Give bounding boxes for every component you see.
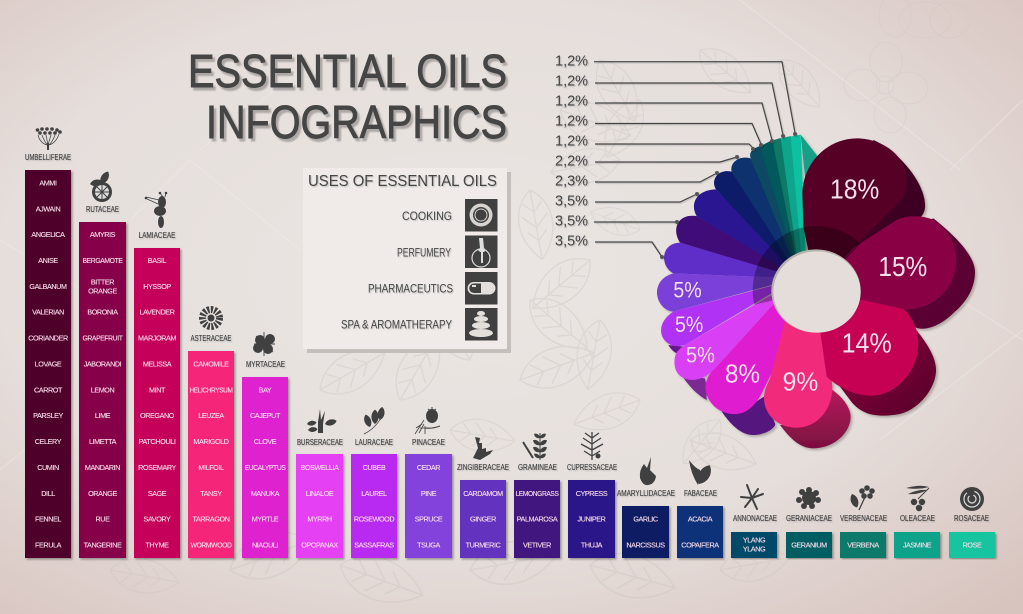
label: Amaryllidaceae: AMARYLLIDACEAE — [617, 489, 675, 498]
bar: Gramineae: LEMONGRASS — [516, 489, 559, 498]
bar: Umbelliferae: FERULA — [35, 540, 62, 550]
bar: Myrtaceae: BAY — [259, 385, 272, 394]
column: Pinaceae — [405, 407, 452, 558]
bar: Umbelliferae — [25, 170, 71, 558]
bar: Pinaceae: CEDAR — [417, 463, 440, 472]
column: Amaryllidaceae — [617, 457, 675, 558]
small percentage labels: 1,2% — [555, 94, 588, 110]
bar: Umbelliferae: DILL — [41, 489, 55, 498]
bar: Lauraceae: CUBEB — [363, 463, 386, 472]
bar: Oleaceae: JASMINE — [903, 540, 932, 550]
percentage labels: 15% — [878, 251, 927, 282]
column: Cupressaceae — [567, 432, 617, 558]
bar: Rutaceae: ORANGE — [88, 489, 117, 498]
percentage labels: 14% — [842, 328, 892, 359]
bar: Rutaceae — [79, 222, 126, 558]
title: ESSENTIAL OILS — [188, 45, 507, 97]
small percentage labels: 2,3% — [555, 174, 588, 190]
column: Rutaceae — [79, 170, 126, 558]
label: Fabaceae: FABACEAE — [684, 489, 717, 498]
small percentage labels: 3,5% — [555, 214, 588, 230]
label: Zingiberaceae: ZINGIBERACEAE — [457, 463, 509, 472]
percentage labels — [673, 173, 927, 397]
bar: Myrtaceae: MANUKA — [251, 489, 280, 498]
leader lines — [594, 62, 797, 259]
bar: Cupressaceae — [568, 480, 615, 558]
use: pharmaceutics — [368, 272, 498, 304]
centre hole — [771, 249, 861, 333]
bar: Zingiberaceae: CARDAMOM — [463, 489, 503, 498]
bar: Asteraceae: MILFOIL — [198, 463, 224, 472]
bar: Verbenaceae: VERBENA — [847, 540, 879, 550]
bar: Pinaceae — [405, 454, 452, 558]
column: Annonaceae — [731, 485, 777, 558]
bar: Asteraceae: TANSY — [200, 489, 222, 498]
bar: Umbelliferae: FENNEL — [35, 515, 61, 524]
bar: Lauraceae: SASSAFRAS — [354, 540, 394, 550]
bar: Umbelliferae: ANGELICA — [31, 230, 65, 239]
heading: uses of essential oils: USES OF ESSENTIAL OILS — [308, 173, 497, 190]
bar: Cupressaceae: JUNIPER — [578, 515, 606, 524]
petal faces — [657, 135, 956, 428]
bar: Pinaceae: SPRUCE — [415, 515, 443, 524]
bar: Lamiaceae: THYME — [145, 540, 169, 550]
use: spa and aromatherapy: SPA & AROMATHERAPY — [341, 318, 452, 332]
icon: frankincense sprig — [307, 409, 337, 433]
percentage labels: 5% — [673, 277, 702, 302]
small percentage labels: 1,2% — [555, 74, 588, 90]
column: Burseraceae — [296, 409, 343, 558]
bar: Rutaceae: LIMETTA — [89, 437, 117, 446]
bar: Burseraceae — [296, 454, 343, 558]
bar: Myrtaceae: CAJEPUT — [250, 411, 281, 420]
icon: bee — [145, 192, 167, 228]
bar: Burseraceae: MYRRH — [307, 515, 332, 524]
bar: Rosaceae: ROSE — [963, 540, 982, 550]
bar: Gramineae: PALMAROSA — [517, 515, 558, 524]
flower pie chart — [657, 135, 975, 448]
bar: Lamiaceae: BASIL — [148, 256, 167, 265]
bar: Umbelliferae: PARSLEY — [33, 411, 64, 420]
small percentage labels: 1,2% — [555, 114, 588, 130]
column: Geraniaceae — [786, 487, 832, 558]
bar: Rutaceae: GRAPEFRUIT — [82, 334, 123, 343]
bar: Umbelliferae: AMMI — [39, 178, 57, 188]
label: Umbelliferae: UMBELLIFERAE — [25, 153, 71, 162]
bar: Lamiaceae: PATCHOULI — [138, 437, 176, 446]
bar: Gramineae — [514, 480, 560, 558]
bar: Rutaceae: LEMON — [91, 385, 114, 394]
icon: pine cone — [415, 407, 440, 434]
bar: Rutaceae: TANGERINE — [84, 540, 122, 550]
small percentage labels: 3,5% — [555, 194, 588, 210]
label: Rosaceae: ROSACEAE — [954, 514, 989, 523]
bar: Umbelliferae: ANISE — [38, 256, 58, 265]
bar: Lamiaceae — [134, 248, 180, 558]
column: Gramineae — [514, 432, 560, 558]
bar: Asteraceae: HELICHRYSUM — [190, 385, 233, 394]
title — [188, 45, 507, 148]
icon: umbel — [36, 127, 62, 150]
column: Myrtaceae — [242, 332, 288, 558]
panel: uses of essential oils — [303, 168, 511, 353]
bar: Umbelliferae: VALERIAN — [32, 308, 64, 317]
bar: Myrtaceae: NIAOULI — [252, 540, 278, 550]
bar: Rutaceae: RUE — [96, 515, 110, 524]
column: Umbelliferae — [25, 127, 71, 558]
bar: Cupressaceae: THUJA — [581, 540, 603, 550]
bar: Asteraceae: LEUZEA — [198, 411, 224, 420]
icon: laurel sprig — [362, 406, 386, 434]
bar: Umbelliferae: AJWAIN — [36, 204, 60, 213]
bar: Myrtaceae: CLOVE — [254, 437, 277, 446]
inner ring shade — [752, 226, 860, 305]
label: Pinaceae: PINACEAE — [412, 438, 445, 447]
bar: Rutaceae: AMYRIS — [90, 230, 116, 239]
bar: Lauraceae: LAUREL — [361, 489, 387, 498]
use: spa and aromatherapy — [341, 308, 498, 340]
column: Oleaceae — [894, 486, 940, 558]
bar: Myrtaceae — [242, 377, 288, 558]
column: Lauraceae — [351, 406, 397, 558]
bar: Annonaceae: YLANG — [743, 544, 766, 554]
bar: Cupressaceae: CYPRESS — [576, 489, 608, 498]
label: Lamiaceae: LAMIACEAE — [138, 231, 176, 240]
icon: olive branch — [906, 486, 929, 511]
icon: rose — [960, 487, 984, 511]
percentage labels: 9% — [783, 367, 818, 397]
use: perfumery — [397, 236, 498, 268]
bar: Amaryllidaceae: NARCISSUS — [626, 540, 665, 550]
bar: Umbelliferae: LOVAGE — [35, 360, 62, 368]
bar: Lauraceae — [351, 454, 397, 558]
bar: Rutaceae: LIME — [95, 411, 111, 420]
label: Verbenaceae: VERBENACEAE — [840, 514, 887, 523]
icon: grass ear — [523, 432, 548, 460]
bar: Rutaceae: BORONIA — [87, 308, 118, 317]
use: cooking: COOKING — [402, 209, 452, 223]
bar: Rutaceae: BERGAMOTE — [82, 256, 123, 265]
column: Verbenaceae — [840, 485, 887, 558]
bar: Lamiaceae: MINT — [149, 385, 166, 394]
bar: Myrtaceae: EUCALYPTUS — [244, 463, 286, 472]
bar: Pinaceae: PINE — [421, 489, 437, 498]
bar: Asteraceae: TARRAGON — [192, 515, 230, 524]
bar: Fabaceae — [677, 506, 723, 558]
bar: Annonaceae: YLANG — [743, 536, 766, 544]
bar: Burseraceae: LINALOE — [306, 489, 334, 498]
bar: Lamiaceae: MELISSA — [143, 360, 172, 368]
icon: verbena flower — [849, 485, 875, 510]
bar: Zingiberaceae — [460, 480, 506, 558]
bar: Rutaceae: BITTER — [91, 278, 114, 286]
bar: Lamiaceae: LAVENDER — [139, 308, 175, 317]
bar: Rutaceae: JABORANDI — [84, 360, 122, 368]
small percentage labels: 2,2% — [555, 154, 588, 170]
bar: Umbelliferae: CUMIN — [37, 463, 59, 472]
icon: cypress sprig — [581, 432, 603, 460]
bar: Burseraceae: BOSWELLIA — [301, 463, 339, 472]
column: Rosaceae — [949, 487, 995, 558]
bar: Burseraceae: OPOPANAX — [301, 540, 338, 550]
bar: Asteraceae: WORMWOOD — [190, 540, 232, 550]
label: Geraniaceae: GERANIACEAE — [786, 514, 832, 523]
label: Cupressaceae: CUPRESSACEAE — [567, 463, 617, 472]
bar: Myrtaceae: MYRTLE — [252, 515, 279, 524]
column: Lamiaceae — [134, 192, 180, 558]
column: Fabaceae — [677, 460, 723, 558]
icon: daisy — [202, 310, 220, 326]
small percentage labels: 1,2% — [555, 54, 588, 70]
label: Lauraceae: LAURACEAE — [355, 438, 393, 447]
bar: Lamiaceae: SAGE — [148, 489, 167, 498]
title: INFOGRAPHICS — [206, 96, 507, 148]
icon: ginger root — [473, 437, 493, 460]
use: perfumery: PERFUMERY — [397, 246, 451, 260]
label: Oleaceae: OLEACEAE — [900, 514, 935, 523]
icon: citrus — [89, 170, 112, 202]
small percentage labels: 3,5% — [555, 234, 588, 250]
use: pharmaceutics: PHARMACEUTICS — [368, 282, 453, 296]
icon: geranium cluster — [796, 487, 821, 509]
icon: narcissus bulb — [640, 457, 656, 485]
bar: Geraniaceae: GERANIUM — [791, 540, 827, 550]
label: Myrtaceae: MYRTACEAE — [246, 360, 285, 369]
column: Zingiberaceae — [457, 437, 509, 558]
bar: Lauraceae: ROSEWOOD — [354, 515, 394, 524]
bar: Asteraceae: CAMOMILE — [193, 360, 229, 368]
bar: Fabaceae: COPAIFERA — [681, 540, 719, 550]
bar: Annonaceae — [731, 532, 777, 558]
bar: Lamiaceae: OREGANO — [140, 411, 175, 420]
percentage labels: 8% — [725, 359, 760, 389]
use: cooking — [402, 199, 498, 232]
percentage labels: 5% — [675, 312, 703, 337]
label: Asteraceae: ASTERACEAE — [190, 334, 232, 343]
bar: Zingiberaceae: GINGER — [470, 515, 496, 524]
bar: Gramineae: VETIVER — [523, 540, 551, 550]
bar: Fabaceae: ACACIA — [688, 515, 713, 524]
small percentage labels — [555, 54, 588, 250]
bar: Lamiaceae: MARJORAM — [138, 334, 176, 343]
bar: Lamiaceae: SAVORY — [144, 515, 171, 524]
small percentage labels: 1,2% — [555, 134, 588, 150]
bar: Asteraceae: MARIGOLD — [193, 437, 229, 446]
column: Asteraceae — [188, 310, 234, 558]
label: Rutaceae: RUTACEAE — [86, 205, 119, 214]
bar: Amaryllidaceae: GARLIC — [633, 515, 658, 524]
bar: Umbelliferae: CELERY — [35, 437, 62, 446]
bar: Amaryllidaceae — [622, 506, 669, 558]
bar: Umbelliferae: GALBANUM — [29, 282, 67, 291]
icon: ylang flower — [741, 485, 763, 509]
bar: Rutaceae: MANDARIN — [85, 463, 120, 472]
petal sides — [668, 140, 975, 448]
percentage labels: 5% — [686, 343, 715, 368]
bar: Umbelliferae: CORIANDER — [28, 334, 68, 343]
label: Annonaceae: ANNONACEAE — [733, 514, 777, 523]
bar: Lamiaceae: HYSSOP — [143, 282, 171, 291]
bar: Asteraceae — [188, 351, 234, 558]
bar: Rutaceae: ORANGE — [88, 286, 117, 296]
bar: Pinaceae: TSUGA — [417, 540, 440, 550]
icon: pea pod — [689, 460, 714, 487]
bar: Umbelliferae: CARROT — [34, 385, 63, 394]
icon: myrtle blossom — [253, 332, 275, 356]
percentage labels: 18% — [830, 173, 879, 204]
bar: Lamiaceae: ROSEMARY — [138, 463, 177, 472]
bar: Zingiberaceae: TURMERIC — [466, 540, 501, 550]
label: Gramineae: GRAMINEAE — [518, 463, 557, 472]
label: Burseraceae: BURSERACEAE — [297, 438, 343, 447]
